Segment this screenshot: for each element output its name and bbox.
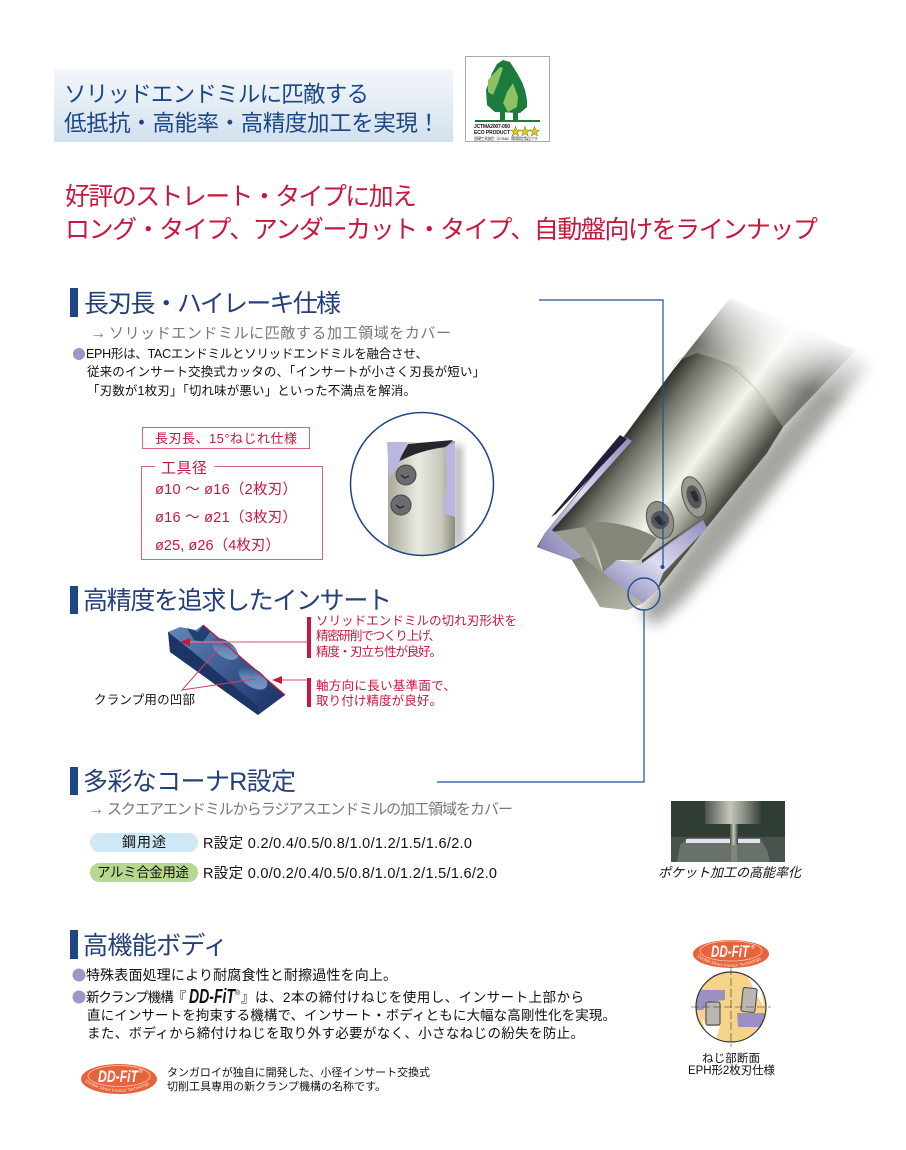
text block: EPH description: 従来のインサート交換式カッタの、「インサートが小さく刃長が短い」 bbox=[87, 364, 485, 379]
insert illustration bbox=[168, 625, 285, 715]
section heading: body: 高機能ボディ bbox=[83, 932, 228, 960]
arrow to cutting edge bbox=[180, 638, 307, 646]
callout: reference surface bbox=[307, 678, 456, 708]
DD-FiT logo small: Double Direct Friction Technology bbox=[85, 1080, 148, 1092]
banner bbox=[54, 69, 453, 142]
subheading: → bbox=[90, 325, 106, 342]
label: clamp recess: クランプ用の凹部 bbox=[94, 693, 195, 707]
eco product badge: 超硬工具協会（JCTMA）環境認定製品です bbox=[474, 135, 538, 141]
DD-FiT logo small: DD-FiT bbox=[98, 1067, 139, 1086]
row: aluminium R settings: アルミ合金用途 bbox=[97, 865, 189, 880]
text block: body features: 新クランプ機構『 bbox=[86, 990, 186, 1005]
red headline bbox=[65, 183, 818, 244]
eco product badge: JCTMA2007-050 bbox=[474, 124, 510, 130]
callout: reference surface: 軸方向に長い基準面で、 bbox=[316, 678, 456, 693]
text block: body features: DD-FiT bbox=[189, 986, 236, 1008]
callout: cutting edge: 精度・刃立ち性が良好。 bbox=[316, 644, 442, 659]
red headline: 好評のストレート・タイプに加え bbox=[65, 183, 417, 211]
red headline: ロング・タイプ、アンダーカット・タイプ、自動盤向けをラインナップ bbox=[65, 216, 818, 244]
connector line: corner R to tool bbox=[437, 578, 660, 782]
row: steel R settings: 鋼用途 bbox=[122, 834, 166, 850]
text block: body features: 』は、2本の締付けねじを使用し、インサート上部から bbox=[241, 989, 584, 1005]
banner: ソリッドエンドミルに匹敵する bbox=[64, 82, 369, 107]
main tool illustration bbox=[537, 298, 872, 626]
eco product badge: ★★★ bbox=[510, 126, 540, 138]
callout: cutting edge: 精密研削でつくり上げ、 bbox=[316, 629, 441, 643]
text block: EPH description: 「刃数が1枚刃」「切れ味が悪い」といった不満点を解消。 bbox=[87, 383, 416, 398]
diagram caption: ねじ部断面 bbox=[702, 1052, 760, 1065]
panel: tool diameters bbox=[142, 460, 322, 560]
section heading: long edge: 長刃長・ハイレーキ仕様 bbox=[84, 290, 341, 318]
row: steel R settings: R設定 0.2/0.4/0.5/0.8/1.0/1.2/1.5/1.6/2.0 bbox=[203, 835, 472, 852]
label: long edge and helix bbox=[142, 428, 310, 448]
DD-FiT logo large bbox=[693, 940, 769, 968]
photo caption: ポケット加工の高能率化 bbox=[658, 865, 802, 880]
callout: cutting edge bbox=[307, 614, 517, 659]
text block: EPH description bbox=[73, 347, 485, 398]
callout: cutting edge: ソリッドエンドミルの切れ刃形状を bbox=[316, 614, 517, 628]
connector line: long edge to tool bbox=[539, 300, 664, 569]
subheading: スクエアエンドミルからラジアスエンドミルの加工領域をカバー bbox=[107, 801, 513, 818]
DD-FiT logo large: Double Direct Friction Technology bbox=[697, 954, 760, 968]
row: steel R settings bbox=[90, 833, 472, 852]
text block: DD-FiT note: 切削工具専用の新クランプ機構の名称です。 bbox=[167, 1079, 386, 1093]
callout: reference surface: 取り付け精度が良好。 bbox=[316, 693, 442, 708]
text block: body features: 特殊表面処理により耐腐食性と耐擦過性を向上。 bbox=[86, 967, 397, 983]
text block: body features: 直にインサートを拘束する機構で、インサート・ボディともに大幅な高剛性化を実現。 bbox=[87, 1007, 616, 1023]
row: aluminium R settings: R設定 0.0/0.2/0.4/0.5/0.8/1.0/1.2/1.5/1.6/2.0 bbox=[203, 865, 497, 882]
text block: DD-FiT note: タンガロイが独自に開発した、小径インサート交換式 bbox=[167, 1065, 430, 1079]
label: long edge and helix: 長刃長、15°ねじれ仕様 bbox=[155, 431, 297, 446]
circle detail of cutter tip bbox=[350, 412, 494, 560]
panel: tool diameters: ø25, ø26（4枚刃） bbox=[155, 537, 280, 554]
panel: tool diameters: 工具径 bbox=[161, 460, 207, 477]
text block: DD-FiT note bbox=[167, 1065, 430, 1093]
row: aluminium R settings bbox=[90, 863, 497, 882]
panel: tool diameters: ø10 ～ ø16（2枚刃） bbox=[155, 481, 297, 498]
diagram caption: EPH形2枚刃仕様 bbox=[688, 1063, 776, 1077]
panel: tool diameters: ø16 ～ ø21（3枚刃） bbox=[155, 509, 297, 526]
DD-FiT logo small bbox=[81, 1064, 157, 1094]
banner: 低抵抗・高能率・高精度加工を実現！ bbox=[64, 111, 440, 136]
section heading: corner R: 多彩なコーナR設定 bbox=[83, 768, 296, 796]
subheading: ソリッドエンドミルに匹敵する加工領域をカバー bbox=[109, 325, 451, 342]
DD-FiT logo large: ® bbox=[751, 944, 755, 951]
text block: body features: また、ボディから締付けねじを取り外す必要がなく、小さなねじの紛失を防止。 bbox=[87, 1025, 584, 1041]
diagram caption bbox=[688, 1052, 776, 1077]
eco product badge: ECO PRODUCT bbox=[474, 130, 510, 136]
section heading: insert: 高精度を追求したインサート bbox=[83, 587, 392, 615]
text block: EPH description: EPH形は、TACエンドミルとソリッドエンドミルを融合させ、 bbox=[86, 347, 428, 361]
text block: body features: ® bbox=[235, 989, 241, 997]
arrow to reference surface bbox=[272, 676, 307, 684]
text block: body features bbox=[72, 967, 616, 1041]
eco product badge bbox=[466, 56, 550, 142]
photo: pocket machining bbox=[671, 801, 785, 862]
subheading: → bbox=[88, 801, 104, 818]
DD-FiT logo small: ® bbox=[139, 1068, 143, 1075]
section diagram: screw cross-section bbox=[691, 967, 771, 1047]
DD-FiT logo large: DD-FiT bbox=[711, 942, 750, 961]
